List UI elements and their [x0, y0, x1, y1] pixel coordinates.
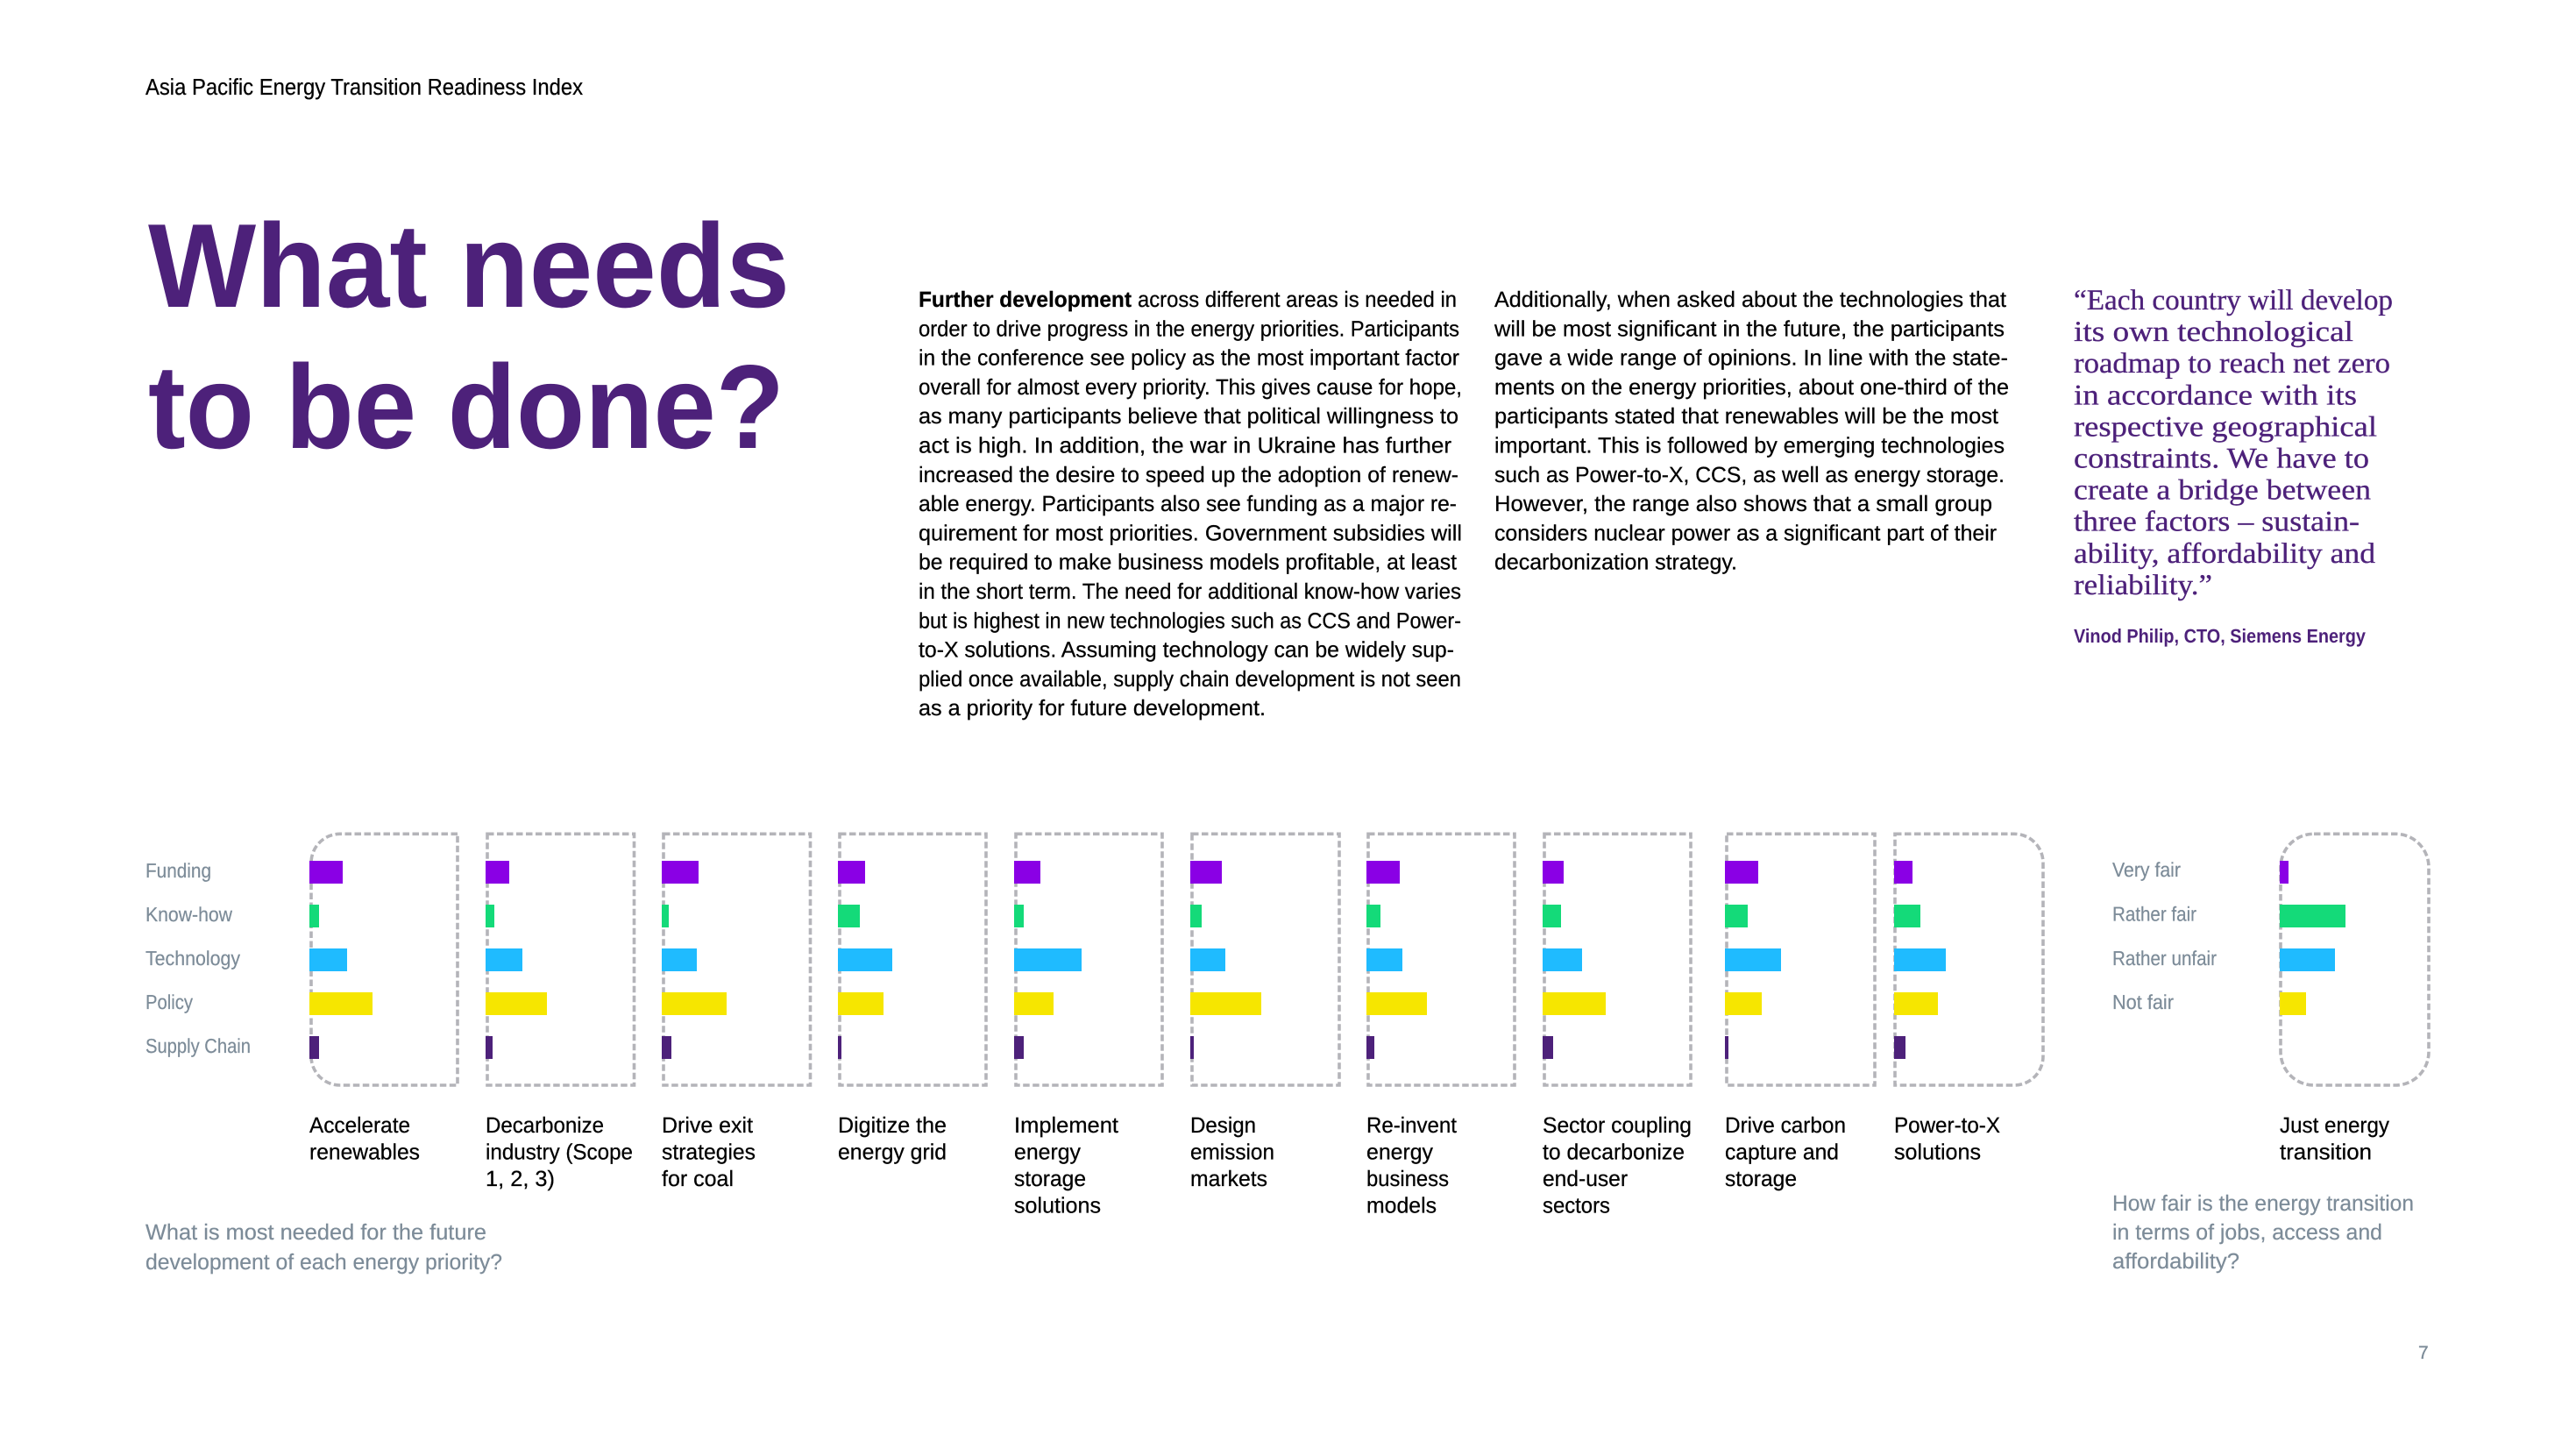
callout: quote: roadmap to reach net zero — [2074, 348, 2390, 380]
text block: body column 2: gave a wide range of opinions. In line with the state- — [1494, 346, 2008, 371]
text block: body column 1: overall for almost every priority. This gives cause for hope, — [919, 375, 1462, 400]
panel: Implement energy storage solutions: Implement — [1014, 1113, 1118, 1138]
callout: quote: three factors – sustain- — [2074, 507, 2360, 538]
callout: quote: respective geographical — [2074, 411, 2377, 443]
text block: body column 2: decarbonization strategy. — [1494, 550, 1737, 575]
title: What needs — [148, 199, 790, 332]
text block: body column 2: However, the range also shows that a small group — [1494, 492, 1992, 516]
panel: Accelerate renewables: Accelerate — [309, 1113, 410, 1138]
caption: needs question: development of each energy priority? — [145, 1250, 502, 1275]
text block: body column 2 — [1494, 288, 2009, 575]
legend: fairness scale: Rather fair — [2112, 903, 2196, 926]
panel: Drive carbon capture and storage — [1725, 834, 1875, 1191]
text block: body column 2: participants stated that renewables will be the most — [1494, 404, 1998, 429]
caption: fairness question: How fair is the energy transition — [2112, 1191, 2414, 1216]
running header: Asia Pacific Energy Transition Readiness Index — [145, 74, 583, 100]
panel: Just energy transition: transition — [2280, 1140, 2372, 1164]
panel: Drive carbon capture and storage: capture and — [1725, 1140, 1839, 1164]
callout: quote: create a bridge between — [2074, 475, 2371, 507]
text block: body column 1: increased the desire to speed up the adoption of renew- — [919, 463, 1458, 487]
legend: needs categories: Policy — [145, 991, 193, 1013]
panel: Sector coupling: sectors — [1543, 1194, 1610, 1218]
panel: Implement energy storage solutions: storage — [1014, 1167, 1086, 1191]
caption: needs question — [145, 1220, 502, 1275]
panel: Re-invent energy business models — [1366, 834, 1515, 1218]
text block: body column 1: as many participants believe that political willingness to — [919, 404, 1458, 429]
panel: Power-to-X solutions — [1894, 834, 2043, 1164]
panel: Design emission markets: emission — [1190, 1140, 1274, 1164]
panel: Just energy transition: Just energy — [2280, 1113, 2389, 1138]
text block: body column 1: across different areas is needed in — [1138, 288, 1457, 312]
text block: body column 1: act is high. In addition, the war in Ukraine has further — [919, 433, 1451, 458]
text block: body column 2: considers nuclear power as a significant part of their — [1494, 521, 1997, 545]
panel: Drive exit strategies for coal — [662, 834, 810, 1191]
panel: Re-invent energy business models: business — [1366, 1167, 1449, 1191]
legend: needs categories: Technology — [145, 947, 240, 970]
callout: quote: in accordance with its — [2074, 380, 2357, 411]
legend: fairness scale: Very fair — [2112, 858, 2181, 881]
text block: body column 1: able energy. Participants also see funding as a major re- — [919, 492, 1457, 516]
text block: body column 2: ments on the energy priorities, about one-third of the — [1494, 375, 2009, 400]
caption: fairness question: in terms of jobs, access and — [2112, 1220, 2382, 1245]
legend: needs categories: Supply Chain — [145, 1034, 251, 1057]
text block: body column 2: Additionally, when asked about the technologies that — [1494, 288, 2006, 312]
legend: fairness scale — [2112, 858, 2217, 1013]
caption: needs question: What is most needed for the future — [145, 1220, 486, 1245]
panel: Digitize the energy grid: Digitize the — [838, 1113, 947, 1138]
callout: quote: ability, affordability and — [2074, 538, 2376, 570]
text block: body column 2: will be most significant in the future, the participants — [1494, 316, 2005, 341]
panel: Decarbonize industry: 1, 2, 3) — [486, 1167, 555, 1191]
callout: quote: constraints. We have to — [2074, 444, 2369, 475]
text block: body column 1: to-X solutions. Assuming technology can be widely sup- — [919, 638, 1454, 663]
panel: Sector coupling: to decarbonize — [1543, 1140, 1685, 1164]
legend: needs categories — [145, 859, 251, 1057]
panel: Sector coupling — [1543, 834, 1692, 1218]
panel: Accelerate renewables — [309, 834, 458, 1164]
panel: Design emission markets: Design — [1190, 1113, 1256, 1138]
panel: Implement energy storage solutions — [1014, 834, 1162, 1218]
callout: quote: its own technological — [2074, 316, 2353, 348]
panel: Sector coupling: end-user — [1543, 1167, 1628, 1191]
panel: Decarbonize industry: Decarbonize — [486, 1113, 604, 1138]
panel: Re-invent energy business models: models — [1366, 1194, 1437, 1218]
panel: Digitize the energy grid: energy grid — [838, 1140, 947, 1164]
legend: fairness scale: Rather unfair — [2112, 947, 2217, 970]
text block: body column 1: order to drive progress in the energy priorities. Participants — [919, 316, 1459, 341]
text block: body column 1: Further development — [919, 288, 1132, 312]
text block: body column 1: as a priority for future development. — [919, 696, 1266, 721]
legend: needs categories: Know-how — [145, 903, 232, 926]
panel: Drive exit strategies for coal: for coal — [662, 1167, 734, 1191]
legend: needs categories: Funding — [145, 859, 211, 882]
text block: body column 2: such as Power-to-X, CCS, as well as energy storage. — [1494, 463, 2005, 487]
caption: fairness question — [2112, 1191, 2414, 1274]
panel: Digitize the energy grid — [838, 834, 986, 1164]
text block: body column 2: important. This is followed by emerging technologies — [1494, 433, 2005, 458]
panel: Drive carbon capture and storage: Drive carbon — [1725, 1113, 1846, 1138]
panel: Drive exit strategies for coal: strategies — [662, 1140, 756, 1164]
callout: quote: “Each country will develop — [2074, 285, 2393, 316]
text block: body column 1: quirement for most priorities. Government subsidies will — [919, 521, 1462, 545]
panel: Power-to-X solutions: Power-to-X — [1894, 1113, 2000, 1138]
callout: quote — [2074, 285, 2393, 647]
text block: body column 1: in the short term. The need for additional know-how varies — [919, 579, 1461, 604]
panel: Design emission markets: markets — [1190, 1167, 1267, 1191]
panel: Implement energy storage solutions: solutions — [1014, 1194, 1101, 1218]
panel: Drive exit strategies for coal: Drive exit — [662, 1113, 753, 1138]
panel: Just energy transition — [2280, 834, 2429, 1164]
callout: quote: reliability.” — [2074, 570, 2212, 601]
caption: fairness question: affordability? — [2112, 1249, 2239, 1274]
text block: body column 1: in the conference see policy as the most important factor — [919, 346, 1459, 371]
legend: fairness scale: Not fair — [2112, 991, 2174, 1013]
text block: body column 1 — [919, 288, 1462, 721]
panel: Implement energy storage solutions: energy — [1014, 1140, 1081, 1164]
panel: Accelerate renewables: renewables — [309, 1140, 420, 1164]
title — [148, 199, 790, 473]
panel: Design emission markets — [1190, 834, 1339, 1191]
text block: body column 1: but is highest in new technologies such as CCS and Power- — [919, 608, 1461, 633]
panel: Decarbonize industry — [486, 834, 635, 1191]
panel: Re-invent energy business models: Re-invent — [1366, 1113, 1457, 1138]
panel: Power-to-X solutions: solutions — [1894, 1140, 1981, 1164]
panel: Decarbonize industry: industry (Scope — [486, 1140, 633, 1164]
panel: Sector coupling: Sector coupling — [1543, 1113, 1692, 1138]
text block: body column 1: plied once available, supply chain development is not seen — [919, 667, 1461, 692]
title: to be done? — [148, 340, 784, 473]
panel: Drive carbon capture and storage: storage — [1725, 1167, 1797, 1191]
page number: 7 — [2418, 1343, 2429, 1363]
quote attribution: Vinod Philip, CTO, Siemens Energy — [2074, 625, 2367, 647]
text block: body column 1: be required to make business models profitable, at least — [919, 550, 1457, 575]
panel: Re-invent energy business models: energy — [1366, 1140, 1433, 1164]
